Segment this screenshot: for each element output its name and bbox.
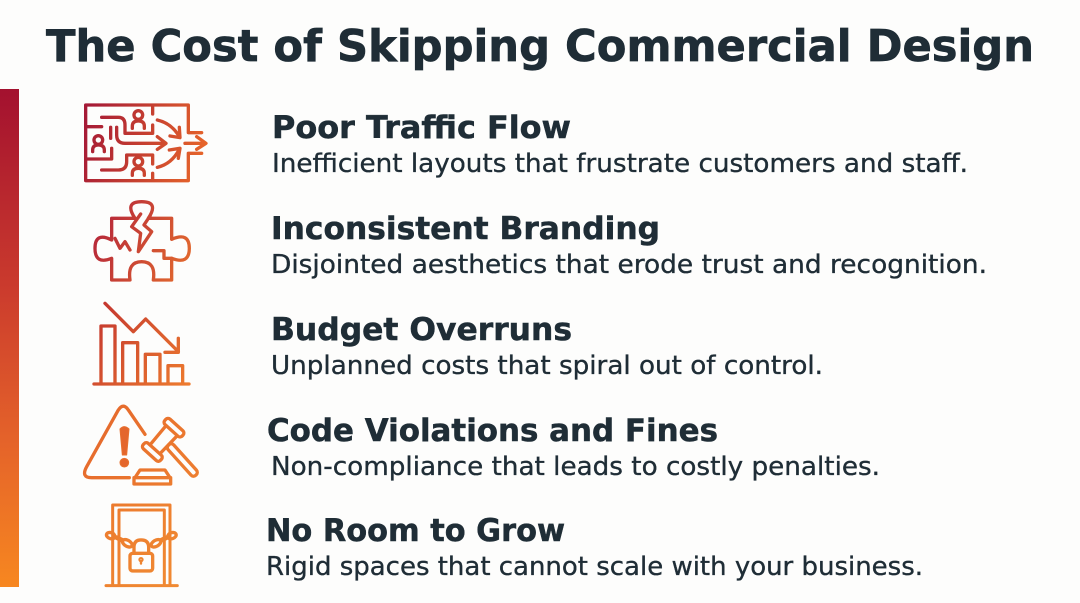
description: Inefficient layouts that frustrate customers and staff. bbox=[272, 149, 968, 179]
description: Unplanned costs that spiral out of control. bbox=[271, 351, 823, 381]
title: The Cost of Skipping Commercial Design bbox=[46, 21, 1034, 72]
heading: Code Violations and Fines bbox=[267, 413, 718, 449]
heading: Inconsistent Branding bbox=[271, 211, 660, 247]
heading: No Room to Grow bbox=[266, 513, 565, 549]
row: code violations bbox=[85, 406, 880, 484]
icon: cracked puzzle piece bbox=[95, 202, 189, 280]
icon: falling bar chart bbox=[94, 303, 189, 384]
row: inconsistent branding bbox=[95, 202, 987, 280]
icon: traffic maze bbox=[86, 105, 206, 181]
row: budget overruns bbox=[94, 303, 823, 384]
icon: warning triangle and gavel bbox=[85, 406, 199, 484]
row: no room to grow bbox=[106, 505, 923, 586]
description: Disjointed aesthetics that erode trust and recognition. bbox=[271, 250, 987, 280]
description: Non-compliance that leads to costly penalties. bbox=[271, 452, 880, 482]
row: poor traffic flow bbox=[86, 105, 968, 181]
heading: Budget Overruns bbox=[271, 312, 572, 348]
gradient side bar bbox=[0, 89, 19, 587]
description: Rigid spaces that cannot scale with your business. bbox=[266, 552, 923, 582]
heading: Poor Traffic Flow bbox=[272, 110, 571, 146]
icon: chained door with padlock bbox=[106, 505, 177, 586]
